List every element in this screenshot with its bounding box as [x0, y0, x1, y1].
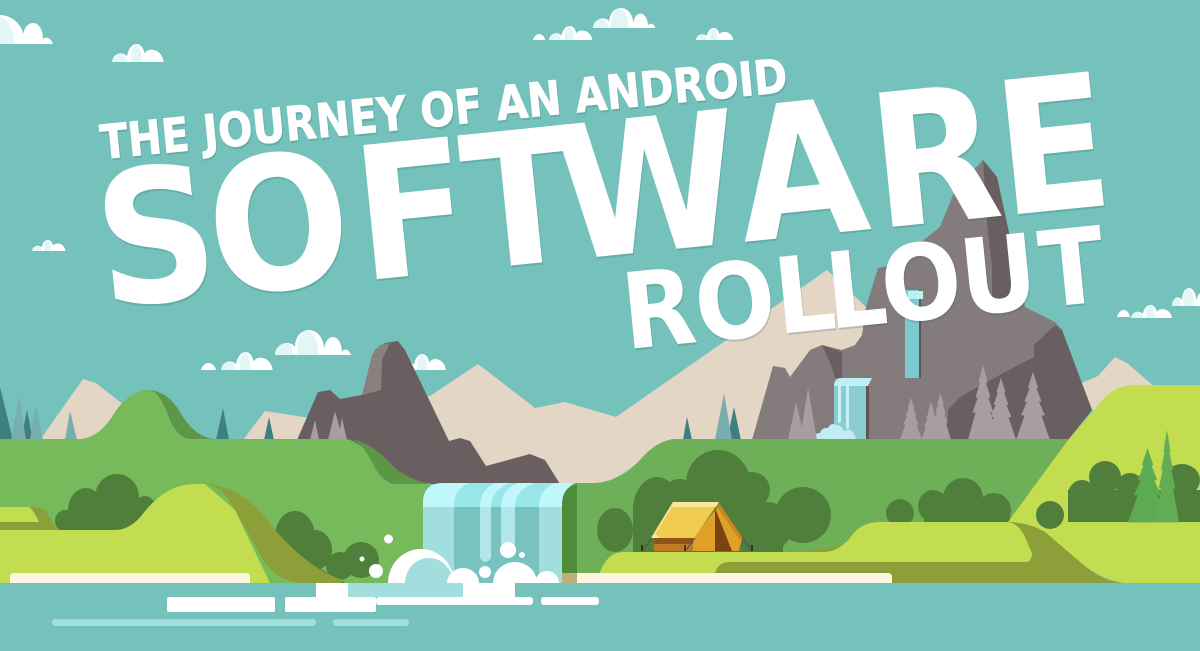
dark mountain, left: [297, 341, 560, 484]
lime shore and olive path, right: [600, 522, 1124, 583]
beach, right: [577, 573, 892, 583]
big grey mountain, right: [752, 160, 1092, 440]
clouds: [0, 8, 1200, 370]
title line: the journey of an android: THE JOURNEY OF AN ANDROID: [98, 49, 790, 171]
thin upper waterfall: [905, 290, 923, 378]
lime hill, left: [0, 484, 345, 583]
beach, left: [10, 573, 250, 583]
cliff edge right of waterfall: [562, 484, 577, 583]
bushes and pines on right hill: [1036, 430, 1200, 529]
back tan mountains: [40, 270, 1156, 484]
waterfall: [423, 483, 575, 583]
water below the shore: [0, 583, 1200, 651]
title line: software: SOFTWARE: [86, 34, 1120, 351]
bushes, left: [55, 474, 379, 583]
right lime hill: [1008, 385, 1200, 583]
right green plateau: [562, 439, 1090, 583]
bushes behind tent: [597, 450, 1011, 552]
splash and foam bubbles: [360, 534, 559, 617]
background pines: [0, 365, 1050, 441]
tent: [642, 502, 752, 551]
title line: rollout: ROLLOUT: [616, 204, 1110, 374]
left green plateau and hill: [0, 390, 430, 583]
water reflections: [52, 583, 599, 626]
title: [86, 34, 1120, 374]
small waterfall: [814, 378, 872, 439]
